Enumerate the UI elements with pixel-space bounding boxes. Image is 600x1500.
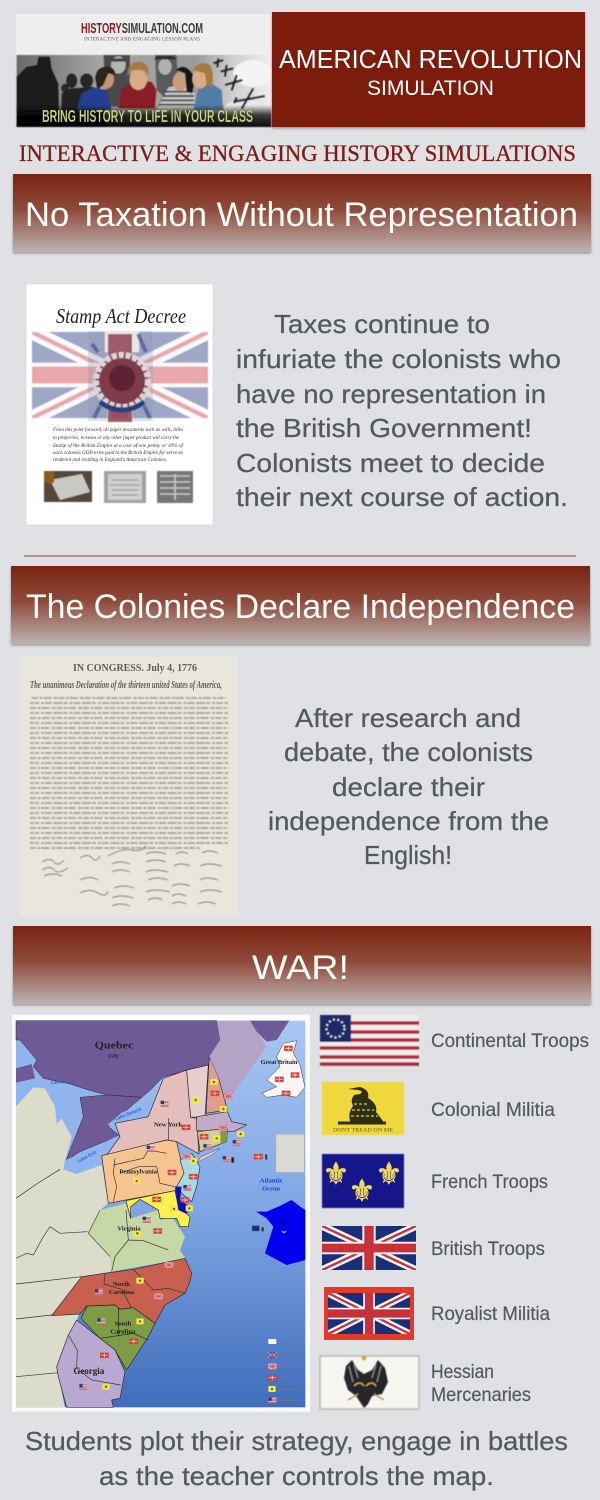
logo subtitle: INTERACTIVE AND ENGAGING LESSON PLANS [84, 38, 200, 43]
legend: Hessian Mercenaries flag [320, 1356, 419, 1409]
New Hampshire [206, 1057, 227, 1113]
map labels [51, 1040, 298, 1376]
header image: History Simulation logo and students [16, 14, 273, 127]
France [256, 1200, 305, 1265]
tagline: INTERACTIVE & ENGAGING HISTORY SIMULATIONS [19, 141, 576, 166]
closing text: Students plot their strategy, engage in battles [25, 1426, 568, 1456]
legend: British Troops flag [322, 1226, 416, 1270]
closing text: as the teacher controls the map. [99, 1461, 494, 1491]
motto: DONT TREAD ON ME [333, 1128, 393, 1134]
legend: Colonial Militia flag [322, 1082, 404, 1135]
banner: WAR! [13, 926, 591, 1004]
Lake Ontario [107, 1097, 154, 1126]
map labels: (GB) [108, 1054, 119, 1059]
paragraph: independence: declare their [332, 772, 485, 802]
decree body text: From this point forward, all paper documents such as wills, titles [52, 426, 183, 433]
title line 1: AMERICAN REVOLUTION [279, 44, 582, 74]
bomber planes [213, 58, 265, 109]
western territories [16, 1087, 112, 1407]
Ontario [66, 1095, 142, 1161]
North Carolina [52, 1258, 192, 1323]
inset box [276, 1134, 304, 1172]
map labels: Atlantic [260, 1178, 283, 1185]
legend label: Hessian Mercenaries [431, 1361, 531, 1406]
map labels: Virginia [117, 1226, 141, 1233]
paragraph: independence [268, 703, 549, 870]
map legend [268, 1339, 299, 1403]
map labels: Lake Ontario [114, 1106, 143, 1122]
map labels: Lake Erie [77, 1149, 98, 1164]
Delaware [175, 1187, 190, 1214]
map labels: Great Britain [261, 1059, 298, 1066]
map labels: France [276, 1220, 294, 1226]
legend label: Colonial Militia: Colonial Militia [431, 1099, 555, 1121]
legend: French Troops flag [322, 1154, 404, 1209]
faded British flag with royal seal [32, 331, 208, 422]
paragraph: taxes: Colonists meet to decide [236, 448, 545, 478]
paragraph: taxes: their next course of action. [236, 482, 568, 512]
Quebec [16, 1021, 220, 1097]
title line 2: SIMULATION [367, 77, 494, 100]
legend label: Hessian Mercenaries: Mercenaries [431, 1384, 531, 1406]
declaration heading: IN CONGRESS. July 4, 1776 [73, 663, 197, 674]
legend: Royalist Militia flag [324, 1287, 414, 1340]
Lake Erie [63, 1135, 120, 1174]
eagle [344, 1356, 388, 1408]
closing text [25, 1426, 568, 1491]
Maryland [126, 1191, 190, 1227]
silhouettes [17, 57, 60, 127]
fleurs-de-lis: ⚜ [323, 1157, 349, 1192]
clouds [233, 60, 273, 87]
map labels: Carolina [110, 1328, 136, 1335]
Vermont [187, 1065, 208, 1117]
declaration subheading: The unanimous Declaration of the thirteen united States of America, [30, 680, 222, 691]
classroom photo [17, 55, 273, 127]
banner: WAR!: WAR! [252, 949, 349, 987]
paragraph: taxes [236, 309, 568, 512]
map labels: Quebec [95, 1040, 133, 1052]
decree body text [52, 426, 184, 463]
map of the colonies [12, 1015, 310, 1412]
student 1 [77, 87, 112, 110]
banner: No Taxation Without Representation [13, 174, 591, 252]
photo slogan: BRING HISTORY TO LIFE IN YOUR CLASS [42, 106, 253, 126]
map markers [79, 1046, 299, 1390]
thumbnail: parchment [44, 471, 92, 502]
legend label: Continental Troops: Continental Troops [431, 1030, 589, 1052]
legend label: Royalist Militia: Royalist Militia [431, 1303, 550, 1325]
Great Britain [262, 1041, 305, 1097]
Connecticut and Rhode Island [197, 1128, 227, 1152]
men in background [103, 55, 130, 107]
decree body text: each colonies GDP to be paid to the British Empire for services [53, 449, 183, 456]
South Carolina [81, 1305, 155, 1370]
New York [107, 1070, 199, 1155]
image: Stamp Act Decree document [26, 284, 213, 525]
image: Declaration of Independence [20, 657, 238, 916]
student 3 [157, 84, 195, 110]
map labels: Pennsylvania [119, 1168, 158, 1175]
legend label: Hessian Mercenaries: Hessian [431, 1361, 494, 1383]
map labels: North [113, 1281, 130, 1288]
title panel [272, 12, 585, 127]
Virginia [88, 1203, 185, 1272]
map labels: Ocean [262, 1186, 280, 1193]
map labels: Carolina [109, 1289, 135, 1296]
paragraph: taxes: have no representation in [236, 379, 546, 409]
map labels: South [115, 1320, 132, 1327]
paragraph: independence: After research and [295, 703, 521, 733]
map labels: Lake Huron [51, 1079, 76, 1084]
Pennsylvania [102, 1140, 185, 1203]
banner: The Colonies Declare Independence [11, 566, 590, 644]
legend label: French Troops: French Troops [431, 1171, 548, 1193]
ocean [16, 1021, 305, 1407]
logo wordmark: HISTORYSIMULATION.COM [81, 21, 203, 37]
paragraph: taxes: the British Government! [236, 413, 532, 443]
paragraph: taxes: infuriate the colonists who [236, 344, 561, 374]
decree body text: Stamp of the British Empire at a cost of one penny or 10% of [53, 442, 184, 449]
rattlesnake [348, 1087, 384, 1124]
thumbnail: certificate [104, 471, 146, 503]
map labels: New York [154, 1122, 182, 1129]
legend: Continental Troops flag [320, 1015, 419, 1065]
thumbnail: newspaper [157, 471, 193, 503]
banner: No Taxation Without Representation: No Taxation Without Representation [25, 196, 578, 234]
Massachusetts [197, 1112, 247, 1132]
map labels: Georgia [73, 1366, 105, 1376]
paragraph: independence: debate, the colonists [284, 737, 533, 767]
New Jersey [177, 1153, 200, 1202]
legend label: British Troops: British Troops [431, 1238, 545, 1260]
decree title: Stamp Act Decree [56, 304, 186, 328]
student 4 [193, 83, 223, 110]
Maine [209, 1021, 267, 1100]
paragraph: independence: English! [364, 840, 452, 870]
student 2 [118, 81, 157, 108]
signatures [42, 846, 222, 906]
legend: French Troops flag: ⚜ [349, 1174, 375, 1209]
banner: The Colonies Declare Independence: The Colonies Declare Independence [26, 588, 575, 626]
declaration body script [30, 698, 228, 848]
paragraph: taxes: Taxes continue to [274, 309, 490, 339]
Georgia [57, 1320, 125, 1407]
decree body text: to properties, licenses or any other paper product will carry the [53, 435, 180, 441]
paragraph: independence: independence from the [268, 806, 549, 836]
legend: French Troops flag: ⚜ [376, 1157, 402, 1192]
decree body text: rendered and residing in England's American Colonies. [53, 457, 167, 463]
